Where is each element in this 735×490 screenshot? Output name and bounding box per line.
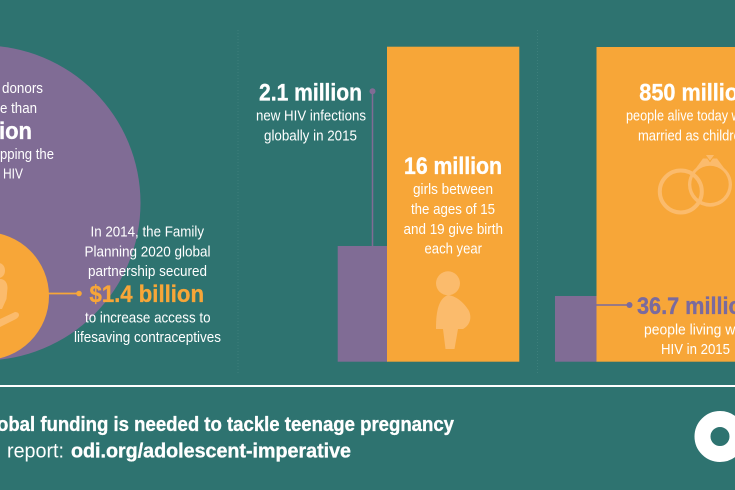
- label: 16 million girls: the ages of 15: [411, 201, 495, 218]
- label: 2.1 million new HIV infections: new HIV infections: [256, 108, 366, 125]
- donors text block: pping the: [0, 146, 54, 163]
- label: 2.1 million new HIV infections: 2.1 million: [259, 79, 362, 106]
- callout: Family Planning 2020: to increase access to: [85, 310, 210, 326]
- footer message: [0, 413, 455, 462]
- label: 850 million married as children: [626, 79, 735, 144]
- label: 16 million girls: [404, 153, 503, 258]
- icon: figure in orange circle: [0, 263, 19, 327]
- icon: ODI logo ring: [702, 419, 735, 454]
- donors text block: ion: [0, 118, 32, 145]
- callout: Family Planning 2020: partnership secured: [88, 263, 207, 280]
- bar: people living with HIV: [555, 296, 597, 362]
- callout: Family Planning 2020: In 2014, the Family: [90, 224, 204, 240]
- label: 2.1 million new HIV infections: [256, 79, 366, 144]
- connector: orange circle to callout: [48, 291, 82, 296]
- icon: wedding rings: [660, 154, 732, 212]
- callout: Family Planning 2020: [74, 224, 221, 346]
- connector: HIV bar to label: [596, 302, 632, 308]
- callout: Family Planning 2020: lifesaving contraceptives: [74, 329, 221, 346]
- bar: people married as children: [596, 47, 735, 362]
- panel: child marriage vs people living with HIV: [555, 47, 735, 362]
- donors text block: donors: [2, 80, 43, 97]
- bar: new HIV infections: [338, 246, 388, 362]
- orange family planning circle: [0, 232, 49, 360]
- label: 36.7 million people living with HIV: [637, 293, 735, 358]
- icon: pregnant girl: [436, 271, 470, 349]
- callout: Family Planning 2020: Planning 2020 global: [84, 244, 210, 260]
- footer message: obal funding is needed to tackle teenage pregnancy: [0, 413, 455, 436]
- label: 2.1 million new HIV infections: globally in 2015: [264, 128, 357, 144]
- donors text block: e than: [0, 100, 37, 117]
- bar: girls giving birth: [387, 47, 519, 362]
- panel: donor funding circles: [0, 46, 221, 360]
- label: 16 million girls: each year: [424, 240, 482, 258]
- footer message: report:: [7, 440, 64, 462]
- panel: HIV infections vs teenage births: [256, 47, 519, 362]
- callout: Family Planning 2020: $1.4 billion: [90, 281, 204, 308]
- footer message: odi.org/adolescent-imperative: [71, 440, 351, 462]
- label: 16 million girls: 16 million: [404, 153, 502, 180]
- label: 16 million girls: girls between: [413, 181, 493, 198]
- donors text block: [0, 80, 54, 182]
- label: 16 million girls: and 19 give birth: [404, 221, 503, 238]
- purple funding circle: [0, 46, 140, 360]
- donors text block: HIV: [3, 166, 23, 182]
- connector: HIV bar to label: [370, 88, 376, 246]
